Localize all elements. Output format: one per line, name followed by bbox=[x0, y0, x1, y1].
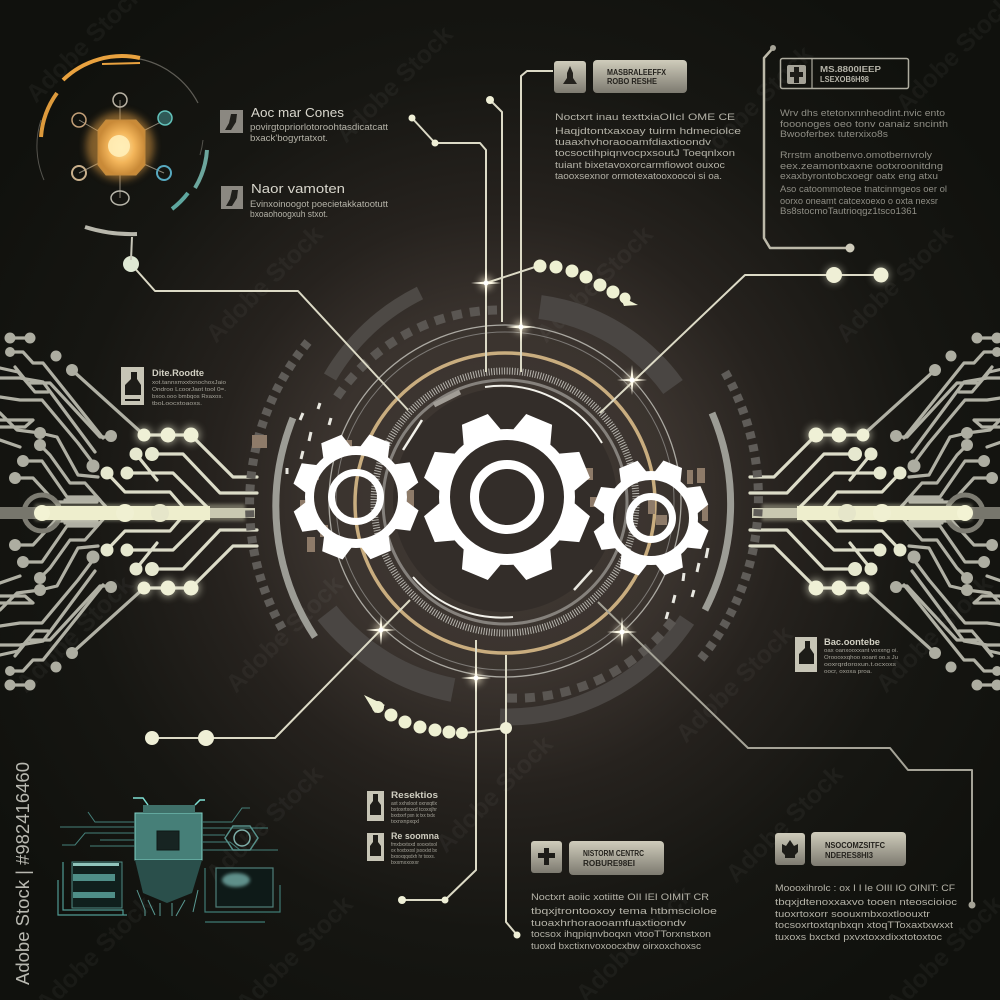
top right label box bbox=[780, 58, 908, 88]
bottom right paragraph bbox=[775, 883, 958, 942]
top right paragraph: Bwooferbex tuterxixo8s bbox=[780, 129, 889, 139]
watermark: Adobe Stock bbox=[10, 570, 138, 698]
top center label button: MASBRALEEFFX bbox=[607, 68, 667, 77]
top right paragraph: Aso catoommoteoe tnatcinmgeos oer ol bbox=[780, 184, 947, 194]
top right label box: LSEXOB6H98 bbox=[820, 75, 870, 84]
left legend: Dite.Roodte: xot.tannxmxxtxnochoxJaio bbox=[152, 380, 226, 386]
bottom center label button: ROBURE98EI bbox=[583, 859, 635, 868]
top center paragraph bbox=[555, 112, 741, 181]
top right paragraph: Bs8stocmoTautrioqgz1tsco1361 bbox=[780, 206, 917, 216]
watermark: Adobe Stock bbox=[870, 570, 998, 698]
bottom right label button: NDERES8HI3 bbox=[825, 851, 874, 860]
bead arc bottom bbox=[364, 695, 468, 739]
right legend: Bac.oontebe: ooxrqrdoroxun.t.ocxoxs bbox=[824, 662, 896, 668]
bottom center paragraph bbox=[531, 892, 717, 951]
left legend: Dite.Roodte: Dite.Roodte bbox=[152, 368, 204, 378]
watermark: Adobe Stock bbox=[690, 40, 818, 168]
bottom center paragraph: tocsox ihqpiqnvboqxn vtooTTorxnstxon bbox=[531, 929, 711, 939]
top center paragraph: tuaaxhvhoraooamfdiaxtioondv bbox=[555, 137, 712, 147]
bottom center paragraph: tuoaxhrhoraooamfuaxtioondv bbox=[531, 918, 687, 928]
top right paragraph bbox=[780, 108, 948, 216]
small legend: Re soomna: fmxbxxtxxd xooxxtxol bbox=[391, 842, 437, 848]
top center paragraph: tocsoctihpiqnvocpxsoutJ Toeqnlxon bbox=[555, 148, 735, 158]
right legend: Bac.oontebe: oax oanxooxxant voxxng oi. bbox=[824, 648, 898, 654]
bottom right label button bbox=[775, 832, 906, 866]
watermark: Adobe Stock bbox=[330, 20, 458, 148]
right legend: Bac.oontebe bbox=[795, 637, 898, 675]
bottom center label button bbox=[531, 841, 664, 875]
bottom right paragraph: tuoxrtoxorr soouxmbxoxtloouxtr bbox=[775, 909, 930, 919]
gear: right bbox=[592, 459, 710, 577]
bottom center paragraph: tbqxjtrontooxoy tema htbmscioloe bbox=[531, 906, 717, 916]
top center label button: ROBO RESHE bbox=[607, 77, 658, 86]
legend item: Aoc mar Cones: povirgtopriorlotoroohtasdicatcatt bbox=[250, 122, 389, 132]
bottom right paragraph: tocsoxrtoxtqnbxqn xtoqTToxaxtxwxxt bbox=[775, 920, 954, 930]
top right paragraph: fooonoges oeo tonv oanaiz sncinth bbox=[780, 119, 948, 129]
small legend: Resektios: axt xxhxloot oxnxqtlx bbox=[391, 801, 437, 807]
bottom right label button: NSOCOMZSITFC bbox=[825, 841, 885, 850]
small legend: Re soomna: bxxmxxoxxr bbox=[391, 860, 419, 866]
top-left hub diagram bbox=[37, 56, 207, 260]
top right label box: MS.8800IEEP bbox=[820, 65, 882, 74]
watermark: Adobe Stock bbox=[720, 760, 848, 888]
top center paragraph: Noctxrt inau texttxiaOIIcI OME CE bbox=[555, 112, 735, 122]
small legend: Resektios: bxxtxxrf pxn ix txx txdx bbox=[391, 813, 435, 819]
left legend: Dite.Roodte: bxoo.ooo bmbqos Rxaxos. bbox=[152, 394, 224, 400]
top center paragraph: taooxsexnor ormotexatooxoocoi si oa. bbox=[555, 171, 722, 181]
small legend: Re soomna: bxooxqqxdxh hr txxxs. bbox=[391, 854, 435, 860]
bottom right paragraph: Moooxihrolc : ox I I Ie OIII IO OINIT: CF bbox=[775, 883, 956, 893]
small legend: Resektios bbox=[367, 790, 438, 825]
gear: center bbox=[422, 412, 592, 582]
top right paragraph: Wrv dhs etetonxnnheodint.nvic ento bbox=[780, 108, 945, 118]
top right paragraph: Rrrstm anotbenvo.omotbernvroly bbox=[780, 150, 933, 160]
bottom right paragraph: tuxoxs bxctxd pxvxtoxxdixxtotoxtoc bbox=[775, 932, 943, 942]
left legend: Dite.Roodte: Ondroo LcoorJaot tool 0=. bbox=[152, 387, 227, 393]
small legend: Resektios: txxnxnpxqxl bbox=[391, 819, 419, 825]
legend item: Aoc mar Cones bbox=[220, 105, 389, 143]
small legend: Re soomna bbox=[367, 831, 440, 866]
legend item: Aoc mar Cones: bxack'bogyrtatxot. bbox=[250, 133, 328, 143]
watermark: Adobe Stock bbox=[430, 730, 558, 858]
watermark: Adobe Stock bbox=[530, 220, 658, 348]
left legend: Dite.Roodte: tboLoocxtoaoxs. bbox=[152, 401, 203, 407]
legend item: Naor vamoten: Naor vamoten bbox=[251, 181, 345, 196]
connector nodes bbox=[123, 45, 976, 938]
connector lines bbox=[131, 48, 972, 935]
left legend: Dite.Roodte bbox=[121, 367, 227, 407]
top center label button bbox=[554, 60, 687, 93]
legend item: Naor vamoten: Evinxoinoogot poecietakkatootutt bbox=[250, 199, 389, 209]
central concentric rings bbox=[250, 293, 758, 717]
watermark: Adobe Stock bbox=[200, 220, 328, 348]
small legend: Re soomna: Re soomna bbox=[391, 831, 440, 841]
right circuit board bbox=[750, 332, 1000, 690]
top right paragraph: oorxo oneamt catcexoexo o oxta nexsr bbox=[780, 196, 938, 206]
teal chip illustration bbox=[58, 798, 280, 922]
left circuit board bbox=[0, 332, 257, 690]
legend item: Naor vamoten bbox=[221, 181, 389, 219]
legend item: Naor vamoten: bxoaohoogxuh stxot. bbox=[250, 209, 328, 219]
small legend: Resektios: Resektios bbox=[391, 790, 438, 800]
bottom right paragraph: tbqxjdtenoxxaxvo tooen nteoscioioc bbox=[775, 897, 958, 907]
small legend: Re soomna: ox hoxtxxoxl jsooxlxt bx bbox=[391, 848, 437, 854]
side stock credit: Adobe Stock | #982416460 bbox=[13, 762, 33, 985]
top right paragraph: exaxbyrontobcxoegr oatx eng atxu bbox=[780, 171, 938, 181]
bottom center label button: NISTORM CENTRC bbox=[583, 849, 644, 858]
right legend: Bac.oontebe: Oroooxxqhoo ooant oo.s Ju bbox=[824, 655, 898, 661]
right legend: Bac.oontebe: Bac.oontebe bbox=[824, 637, 880, 647]
top right paragraph: eex.zeamontxaxne ootxroonitdng bbox=[780, 161, 943, 171]
bead arc top bbox=[534, 260, 638, 306]
sparkle stars bbox=[366, 268, 647, 693]
bottom center paragraph: tuoxd bxctixnvoxoocxbw oirxoxchoxsc bbox=[531, 941, 702, 951]
watermark: Adobe Stock bbox=[830, 220, 958, 348]
watermark: Adobe Stock bbox=[200, 760, 328, 888]
top center paragraph: Haqjdtontxaxoay tuirm hdmeciolce bbox=[555, 126, 741, 136]
gear: left bbox=[292, 433, 420, 561]
watermark: Adobe Stock bbox=[220, 570, 348, 698]
top center paragraph: tuiant bixetavoxorcarmfiowot ouxoc bbox=[555, 160, 726, 170]
bottom center paragraph: Noctxrt aoiic xotiitte OII IEI OIMIT CR bbox=[531, 892, 710, 902]
legend item: Aoc mar Cones: Aoc mar Cones bbox=[251, 105, 345, 120]
small legend: Resektios: bxtoxrtxoxd tcoxxjhr bbox=[391, 807, 437, 813]
right legend: Bac.oontebe: oocr, oxoxa proa. bbox=[824, 669, 873, 675]
watermark: Adobe Stock bbox=[670, 620, 798, 748]
